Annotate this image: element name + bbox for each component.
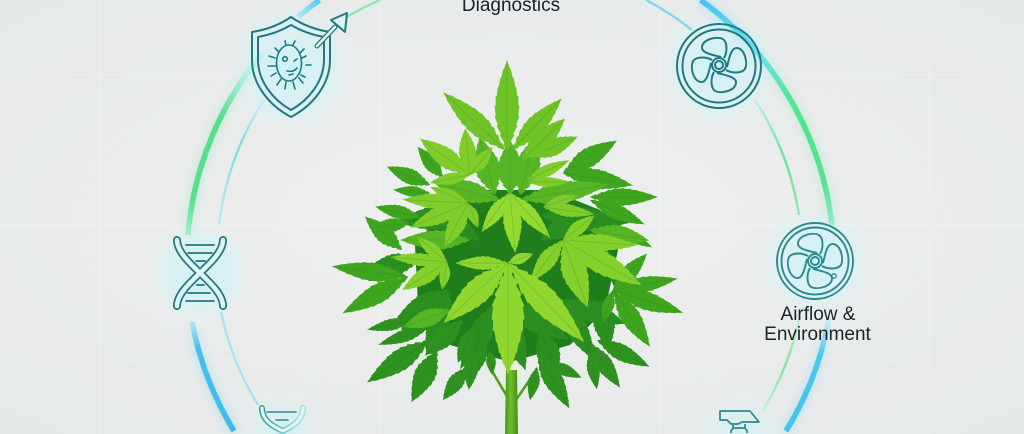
front leaf — [435, 249, 594, 375]
centre leaf — [476, 188, 556, 254]
dark foliage mass — [415, 190, 618, 362]
label: Airflow & Environment: Airflow & — [781, 304, 856, 325]
outer ring — [188, 0, 832, 431]
upper middle leaves — [402, 127, 595, 251]
right and left leaves — [390, 210, 648, 312]
filler leaves — [364, 200, 661, 381]
icon: DNA helix — [177, 240, 223, 306]
icon: shield with microbe — [252, 13, 347, 117]
stem — [489, 366, 535, 434]
top leaf — [435, 60, 581, 167]
middle tone leaves — [400, 134, 651, 336]
icon: fan top right — [677, 24, 761, 108]
icon: DNA helix, lower — [262, 408, 303, 431]
arrow — [317, 13, 347, 46]
label: Airflow & Environment — [764, 304, 872, 345]
icon: spray bottle — [720, 411, 759, 433]
label: Airflow & Environment: Environment — [764, 324, 872, 345]
ring glow — [188, 0, 832, 431]
inner ring — [219, 0, 799, 410]
back leaves: side tier — [330, 132, 686, 352]
back leaves: lower tier — [361, 313, 653, 413]
icon halos — [146, 2, 876, 434]
icon: fan right — [777, 223, 853, 299]
plant — [330, 60, 686, 434]
microbe — [268, 41, 311, 89]
